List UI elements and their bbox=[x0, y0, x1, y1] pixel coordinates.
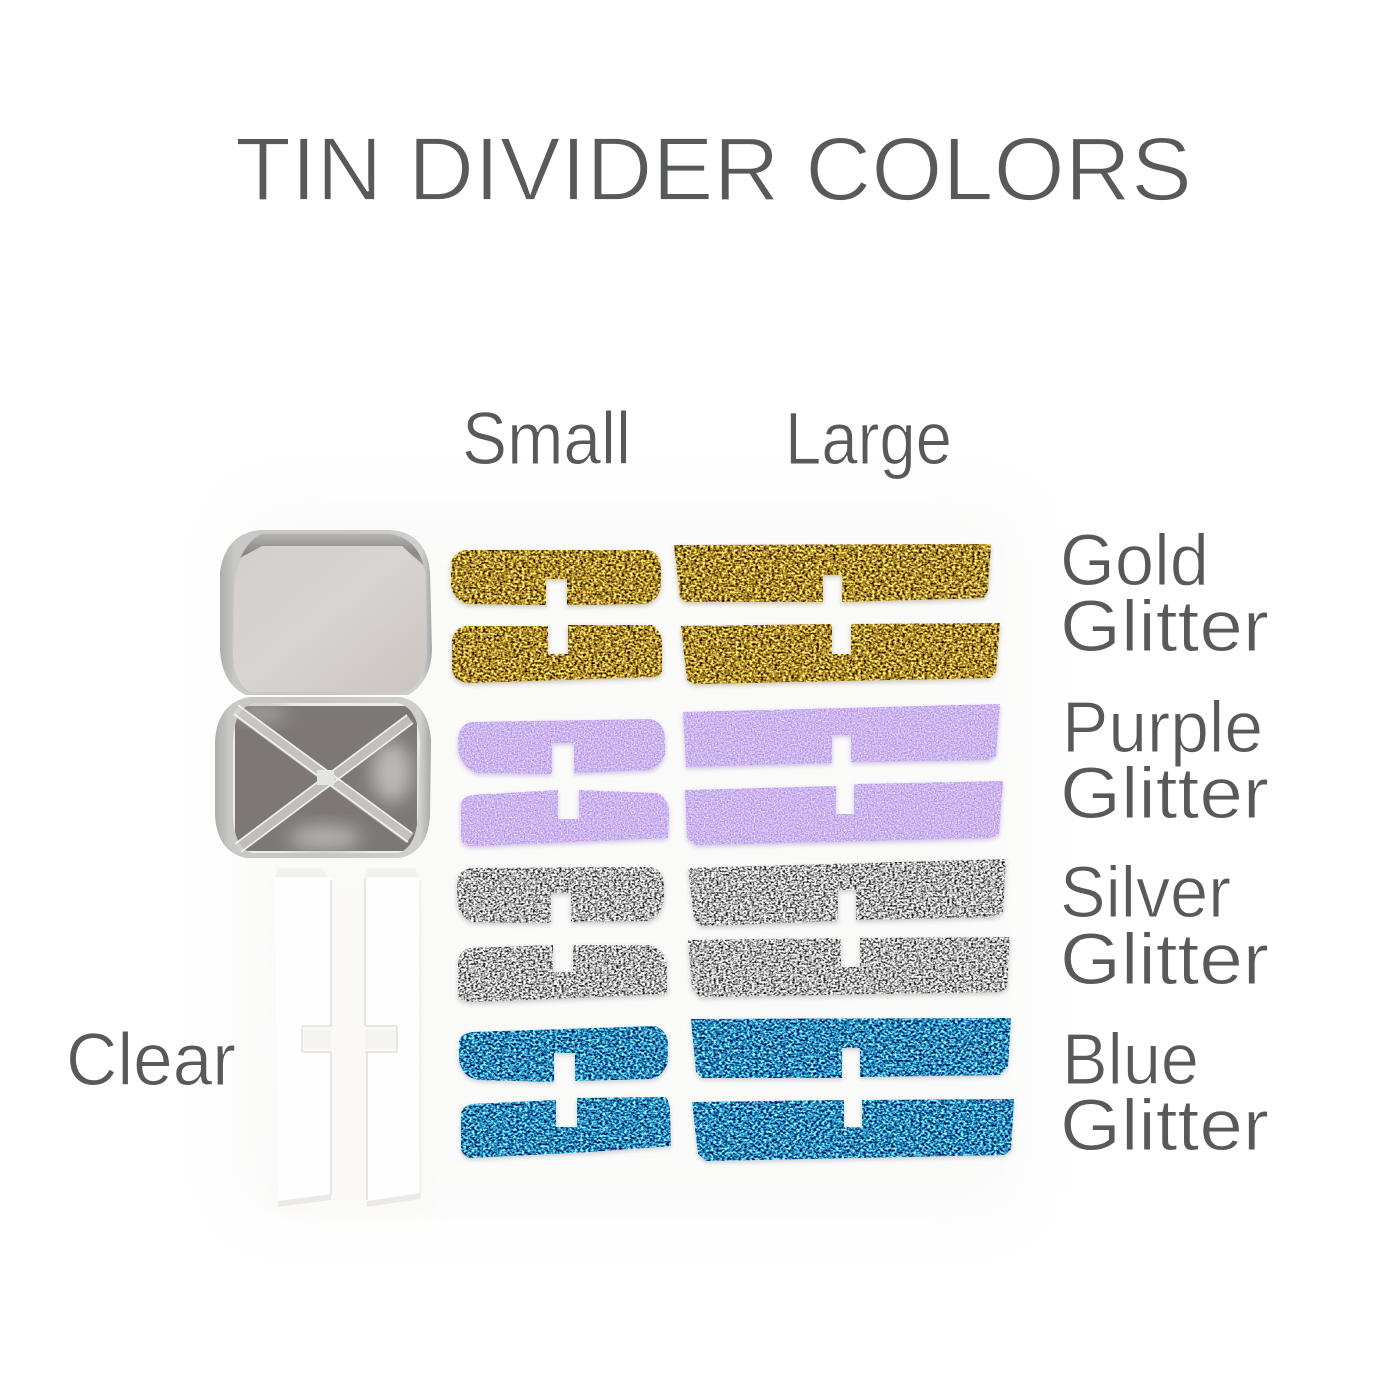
label: Silver Glitter: Glitter bbox=[1060, 920, 1269, 1000]
column heading: Small: Small bbox=[462, 397, 631, 480]
purple small bottom bbox=[461, 790, 669, 846]
left clear strip bbox=[275, 868, 331, 1207]
label: Purple Glitter bbox=[1060, 688, 1269, 834]
purple glitter dividers bbox=[458, 704, 1003, 846]
tin base bbox=[215, 697, 431, 858]
blue large bottom bbox=[692, 1099, 1014, 1161]
purple small top bbox=[458, 719, 665, 774]
clear dividers bbox=[270, 868, 432, 1210]
silver glitter dividers bbox=[457, 859, 1010, 1002]
label: Gold Glitter: Gold bbox=[1060, 521, 1209, 601]
purple large top bbox=[683, 704, 1000, 767]
label: Silver Glitter bbox=[1060, 853, 1269, 1000]
silver small bottom bbox=[458, 945, 667, 1002]
right clear strip bbox=[365, 868, 420, 1207]
gold large bottom bbox=[681, 623, 1000, 684]
label: Blue Glitter bbox=[1060, 1020, 1269, 1166]
label: Purple Glitter: Purple bbox=[1062, 688, 1263, 768]
gold glitter dividers bbox=[451, 544, 1000, 684]
gold large top bbox=[674, 544, 991, 602]
clear dividers crossed in tin bbox=[234, 705, 413, 852]
label: Purple Glitter: Glitter bbox=[1060, 754, 1269, 834]
blue large top bbox=[691, 1018, 1011, 1078]
gold small bottom bbox=[452, 625, 662, 683]
blue glitter dividers bbox=[459, 1018, 1014, 1161]
open tin with dividers bbox=[215, 530, 432, 858]
label: Gold Glitter: Glitter bbox=[1060, 587, 1269, 667]
blue small top bbox=[459, 1026, 668, 1082]
silver large top bbox=[688, 859, 1006, 926]
label: Gold Glitter bbox=[1060, 521, 1269, 667]
label: Clear: Clear bbox=[66, 1018, 236, 1101]
silver small top bbox=[457, 867, 664, 923]
purple large bottom bbox=[685, 781, 1003, 845]
label: Blue Glitter: Blue bbox=[1062, 1020, 1199, 1100]
column heading: Large: Large bbox=[785, 397, 952, 480]
gold small top bbox=[451, 550, 661, 605]
tin lid bbox=[220, 530, 432, 695]
silver large bottom bbox=[688, 937, 1010, 997]
label: Silver Glitter: Silver bbox=[1060, 853, 1231, 933]
label: Blue Glitter: Glitter bbox=[1060, 1086, 1269, 1166]
title: TIN DIVIDER COLORS bbox=[235, 120, 1192, 220]
blue small bottom bbox=[461, 1097, 671, 1158]
